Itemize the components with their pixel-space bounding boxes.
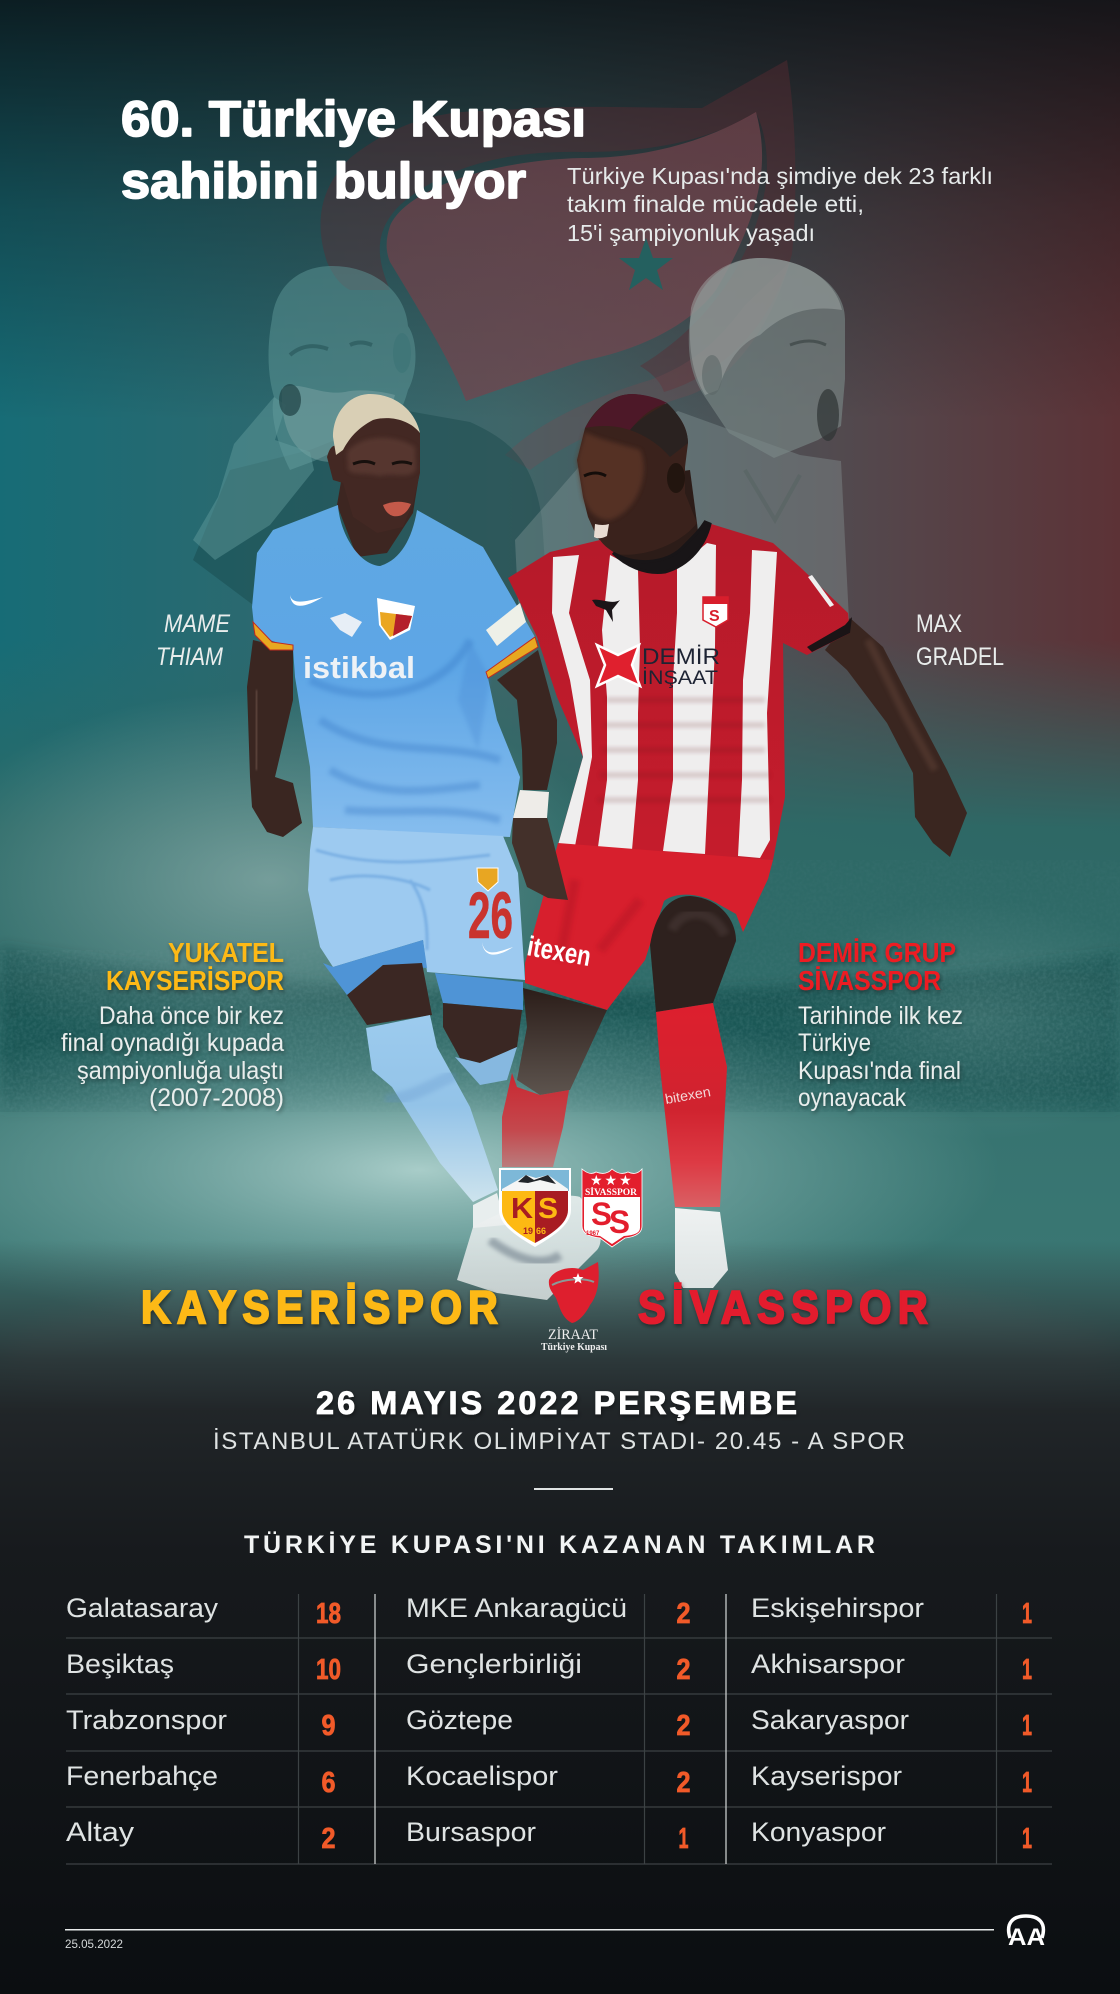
column 1: Altay	[66, 1817, 135, 1847]
icon: puma logo	[592, 600, 620, 622]
column 2: 1	[678, 1823, 688, 1855]
shirt stripes	[552, 543, 834, 858]
icon: star	[619, 238, 673, 290]
sleeve trim	[253, 622, 293, 650]
neck and head	[337, 470, 420, 557]
icon: Kayserispor badge: S	[538, 1193, 558, 1225]
column 2: MKE Ankaragücü	[406, 1593, 627, 1623]
intro text block: takım finalde mücadele etti,	[567, 191, 864, 217]
column 2: 2	[676, 1654, 690, 1686]
column 2: 2	[676, 1710, 690, 1742]
badge on shirt	[377, 598, 415, 640]
icon: Sivasspor badge	[582, 1169, 642, 1247]
column 2: Gençlerbirliği	[406, 1649, 582, 1679]
boot and ball	[457, 1193, 601, 1300]
column 3: Akhisarspor	[751, 1649, 905, 1679]
winners table	[66, 1593, 1052, 1864]
date stamp: 25.05.2022	[65, 1937, 123, 1951]
left arm	[247, 640, 302, 837]
sponsor	[597, 644, 720, 689]
column 1: Beşiktaş	[66, 1649, 174, 1679]
column 2	[406, 1593, 690, 1855]
coach silhouette right	[515, 258, 850, 640]
thighs	[347, 963, 432, 1025]
icon: Sivasspor badge: SİVASSPOR	[585, 1187, 638, 1197]
icon: Sivasspor badge: S	[591, 1196, 612, 1232]
far leg	[517, 988, 607, 1095]
column 1: 2	[322, 1823, 336, 1855]
player name: Max Gradel: MAX	[916, 610, 962, 638]
player name: Mame Thiam	[156, 610, 230, 671]
column 2: 2	[676, 1767, 690, 1799]
column 3: 1	[1022, 1654, 1032, 1686]
team note: Sivasspor: DEMİR GRUP	[798, 937, 956, 968]
team note: Kayserispor	[61, 937, 284, 1112]
calf band	[455, 1047, 517, 1085]
intro text block: Türkiye Kupası'nda şimdiye dek 23 farklı	[567, 163, 993, 189]
column 3: 1	[1022, 1598, 1032, 1630]
match date: 26 MAYIS 2022 PERŞEMBE	[316, 1385, 800, 1421]
column 2: Kocaelispor	[406, 1761, 558, 1791]
icon: nike swoosh on shorts	[482, 942, 513, 955]
team note: Kayserispor: (2007-2008)	[149, 1084, 284, 1112]
column 1: 18	[316, 1598, 341, 1630]
boot	[675, 1208, 728, 1288]
column 1: Fenerbahçe	[66, 1761, 218, 1791]
column 1	[66, 1593, 341, 1855]
player: Mame Thiam (blue)	[247, 394, 601, 1300]
team note: Kayserispor: şampiyonluğa ulaştı	[77, 1057, 284, 1085]
shorts crest	[477, 868, 498, 891]
player name: Max Gradel	[916, 610, 1004, 671]
column 1: 10	[316, 1654, 341, 1686]
neck and head	[613, 470, 700, 570]
sock	[366, 1015, 498, 1202]
intro text block	[567, 163, 993, 246]
icon: Kayserispor badge: K	[511, 1193, 533, 1225]
collar	[613, 522, 710, 573]
icon: club badge on shirt	[703, 597, 728, 627]
team note: Kayserispor: YUKATEL	[168, 937, 284, 968]
column 1: Galatasaray	[66, 1593, 219, 1623]
arm	[825, 618, 967, 857]
shorts	[308, 827, 525, 980]
icon: Kayserispor badge: 19	[523, 1226, 533, 1236]
team note: Sivasspor: oynayacak	[798, 1084, 906, 1112]
team note: Kayserispor: final oynadığı kupada	[61, 1029, 284, 1057]
team note: Sivasspor: Türkiye	[798, 1029, 871, 1057]
player: Max Gradel (red): itexen	[525, 930, 593, 972]
icon: Ziraat cup logo: Türkiye Kupası	[541, 1342, 607, 1353]
sponsor: istikbal	[303, 650, 415, 685]
title: sahibini buluyor	[121, 153, 526, 209]
sponsor: İNŞAAT	[642, 668, 718, 689]
title	[121, 91, 586, 209]
shirt folds	[310, 640, 500, 820]
icon: Sivasspor badge: ★★★	[590, 1172, 634, 1188]
column 1: Trabzonspor	[66, 1705, 227, 1735]
player: Max Gradel (red)	[502, 394, 967, 1288]
sleeve cuff	[807, 617, 852, 652]
title: 60. Türkiye Kupası	[121, 91, 586, 147]
column 3: 1	[1022, 1710, 1032, 1742]
cup emblem watermark	[321, 60, 795, 470]
icon: Sivasspor badge: 1967	[586, 1231, 600, 1237]
player: Max Gradel (red): bitexen	[664, 1083, 712, 1107]
hand	[512, 817, 568, 900]
team note: Sivasspor: SİVASSPOR	[798, 965, 941, 996]
player name: Mame Thiam: THIAM	[156, 643, 223, 671]
team note: Kayserispor: KAYSERİSPOR	[106, 965, 284, 996]
right arm	[497, 650, 557, 790]
column 2: 2	[676, 1598, 690, 1630]
team note: Kayserispor: Daha önce bir kez	[99, 1002, 284, 1030]
column 2: Bursaspor	[406, 1817, 536, 1847]
shirt	[508, 523, 850, 860]
team note: Sivasspor: Tarihinde ilk kez	[798, 1002, 963, 1030]
icon: AA logo: AA	[1008, 1924, 1045, 1951]
icon: hands	[330, 613, 362, 637]
sponsor: DEMİR	[642, 644, 720, 669]
shorts	[525, 843, 773, 1010]
team note: Sivasspor: Kupası'nda final	[798, 1057, 961, 1085]
team name: Sivasspor: SİVASSPOR	[638, 1281, 934, 1333]
team note: Sivasspor	[798, 937, 963, 1112]
column 3	[751, 1593, 1032, 1855]
icon: club badge on shirt: S	[709, 608, 720, 625]
shirt shadows	[598, 700, 770, 800]
captain band	[486, 603, 526, 646]
intro text block: 15'i şampiyonluk yaşadı	[567, 220, 815, 246]
column 2: Göztepe	[406, 1705, 513, 1735]
column 3: Eskişehirspor	[751, 1593, 924, 1623]
wristband	[513, 790, 549, 818]
near leg	[650, 896, 736, 1012]
icon: Ziraat cup logo: ZİRAAT	[548, 1327, 598, 1343]
column 1: 9	[322, 1710, 336, 1742]
shirt number: 26	[468, 878, 513, 952]
icon: Kayserispor badge	[499, 1168, 571, 1247]
column 3: 1	[1022, 1767, 1032, 1799]
column 3: Konyaspor	[751, 1817, 886, 1847]
column 3: Sakaryaspor	[751, 1705, 909, 1735]
icon: Ziraat cup logo	[541, 1262, 607, 1353]
table heading: TÜRKİYE KUPASI'NI KAZANAN TAKIMLAR	[244, 1530, 875, 1559]
column 1: 6	[322, 1767, 336, 1799]
icon: nike swoosh	[290, 595, 323, 606]
player name: Max Gradel: GRADEL	[916, 643, 1004, 671]
match venue: İSTANBUL ATATÜRK OLİMPİYAT STADI- 20.45 - A SPOR	[213, 1428, 905, 1455]
undershorts	[323, 940, 427, 995]
icon: Kayserispor badge: 66	[536, 1226, 546, 1236]
column 3: 1	[1022, 1823, 1032, 1855]
team name: Kayserispor: KAYSERİSPOR	[141, 1281, 504, 1333]
column 3: Kayserispor	[751, 1761, 902, 1791]
coach silhouette left	[193, 266, 550, 640]
icon: Sivasspor badge: S	[609, 1204, 630, 1240]
shirt	[252, 505, 538, 837]
player name: Mame Thiam: MAME	[164, 610, 230, 638]
